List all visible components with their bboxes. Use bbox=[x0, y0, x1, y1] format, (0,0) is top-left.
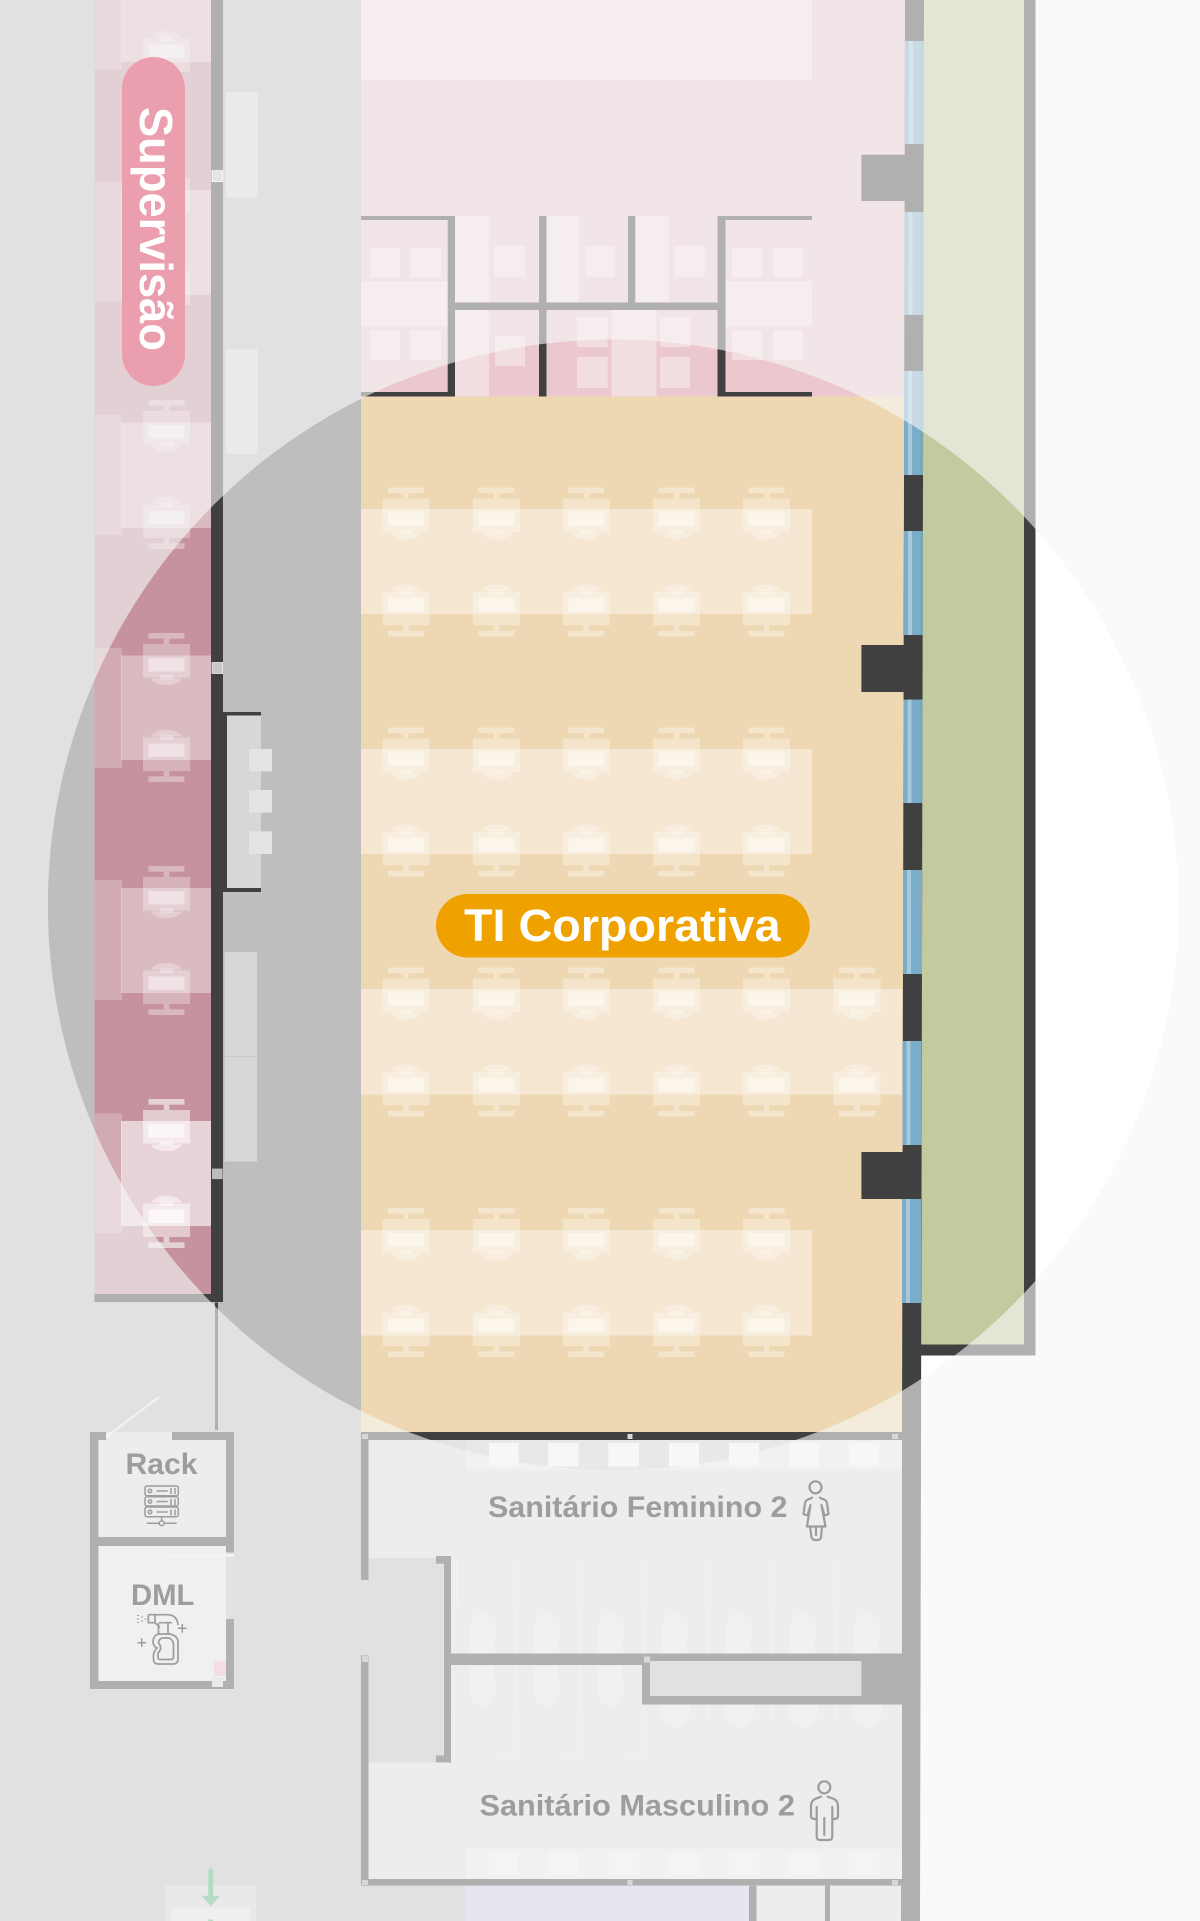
pill: TI Corporativa bbox=[436, 894, 810, 958]
panel: green terrace bbox=[921, 0, 1036, 1356]
panel: corridor furniture bbox=[223, 92, 272, 1162]
corridor floor bbox=[0, 0, 905, 1921]
panel: lower rooms bbox=[165, 1886, 901, 1921]
panel: restroom block bbox=[361, 1432, 902, 1886]
panel: TI Corporativa room bbox=[361, 396, 905, 1432]
restroom lower band bbox=[466, 1849, 902, 1879]
label: DML: DML bbox=[131, 1579, 194, 1612]
wall connectors bbox=[362, 1434, 898, 1885]
label: Sanitário Feminino 2: Sanitário Feminino 2 bbox=[488, 1491, 788, 1524]
icon: man bbox=[811, 1781, 838, 1840]
left wall bbox=[211, 0, 223, 1302]
panel: Rack and DML rooms bbox=[90, 1302, 234, 1689]
icon: server rack bbox=[145, 1486, 178, 1526]
pill: Supervisão: Supervisão bbox=[130, 107, 182, 351]
pill: TI Corporativa: TI Corporativa bbox=[464, 900, 782, 951]
toilets bbox=[470, 1612, 882, 1727]
facade wall and windows bbox=[861, 0, 924, 1921]
label: Rack: Rack bbox=[126, 1448, 198, 1481]
restroom upper band bbox=[466, 1440, 879, 1470]
icon: woman bbox=[804, 1481, 828, 1540]
arrow: exit bbox=[203, 1868, 218, 1921]
label: Sanitário Masculino 2: Sanitário Masculino 2 bbox=[480, 1790, 795, 1822]
pill: Supervisão bbox=[122, 57, 185, 386]
panel: Supervisão room bbox=[94, 0, 212, 1302]
icon: spray bottle bbox=[137, 1615, 187, 1664]
panel: upper offices bbox=[361, 0, 905, 397]
